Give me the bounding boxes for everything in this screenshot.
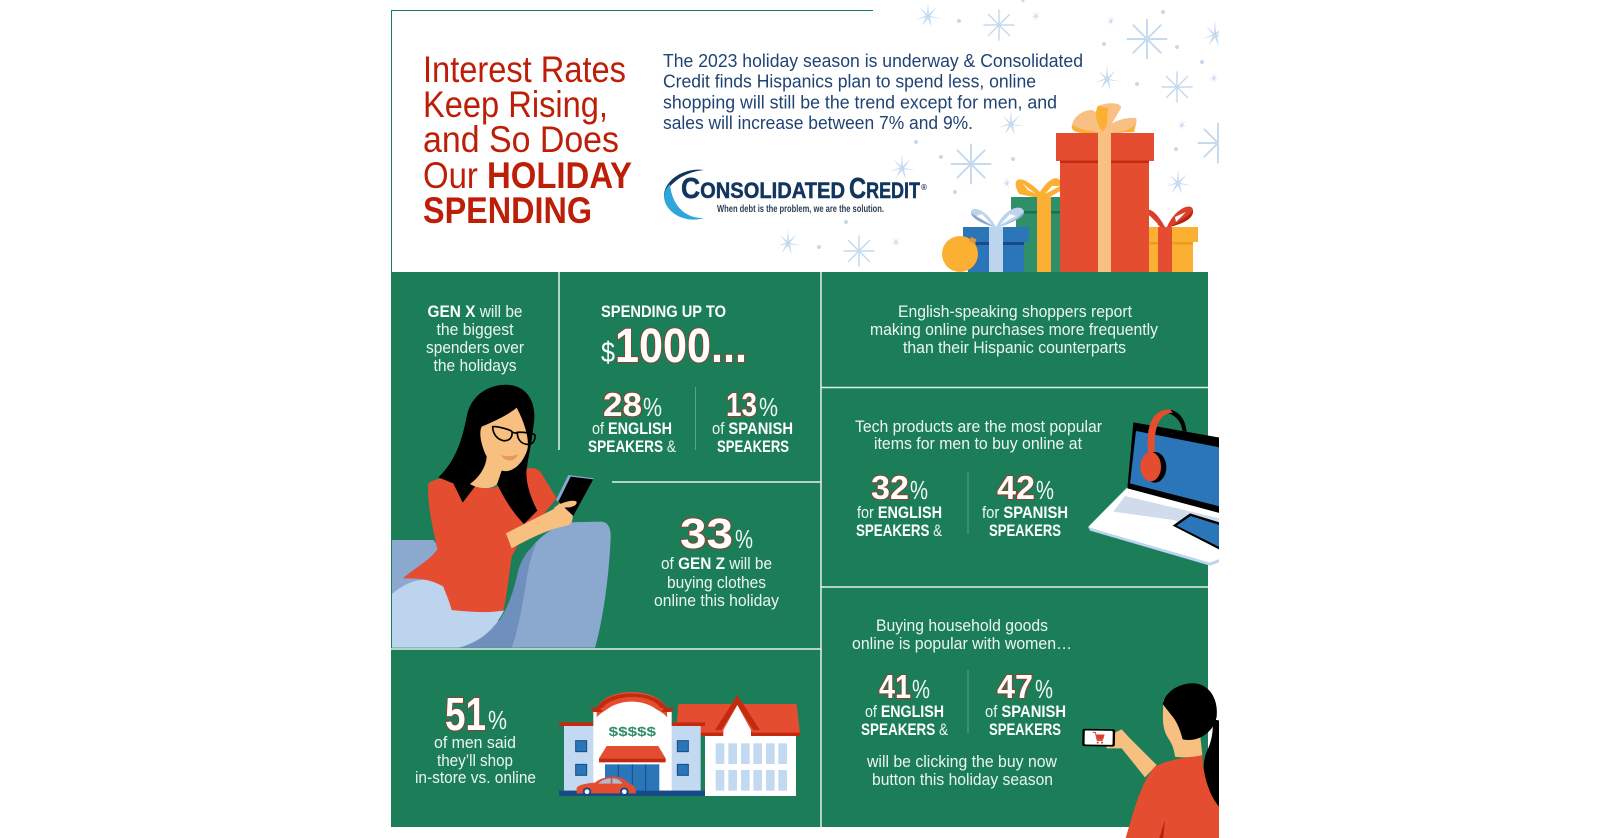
stat: 51% of men: % (488, 705, 507, 735)
stat: 13% Spanish speakers (712, 386, 793, 456)
household text: online is popular with women… (852, 635, 1072, 653)
$1000 figure: $ (601, 337, 615, 369)
face and neck (470, 408, 528, 488)
logo: Consolidated Credit (664, 170, 927, 220)
store centre (590, 692, 674, 791)
stat: 42% Spanish speakers (982, 469, 1068, 540)
right gift (1146, 207, 1198, 272)
Gen X text (426, 303, 524, 375)
stat: 51% of men: they’ll shop (437, 752, 513, 770)
stat: 32% English speakers: SPEAKERS & (856, 522, 942, 540)
panel: Gen Z clothes stat (654, 510, 780, 610)
panel: English speakers online: than their Hispanic counterparts (903, 339, 1126, 357)
panel: Gen X (392, 303, 611, 648)
tech text (855, 418, 1102, 453)
hair (438, 385, 537, 524)
panel: Gen Z clothes stat: 33 (680, 510, 733, 558)
stat: 51% of men: of men said (434, 734, 516, 752)
intro text: sales will increase between 7% and 9%. (663, 112, 973, 133)
logo: Consolidated Credit: CREDIT (849, 173, 920, 205)
Gen X text: the holidays (434, 357, 516, 375)
blue gift (963, 208, 1029, 272)
stat: 32% English speakers: 32 (871, 469, 909, 506)
stat: 28% English speakers: 28 (603, 386, 642, 423)
store centre: $$$$$ (609, 725, 656, 739)
phone on laptop (1172, 513, 1219, 550)
illustration: woman with phone and cart (1082, 683, 1222, 838)
stat: 32% English speakers: % (910, 475, 928, 505)
closing text (866, 753, 1057, 789)
stat: 51% of men (415, 688, 536, 787)
headphones (1140, 409, 1187, 483)
car (577, 777, 636, 796)
stat: 13% Spanish speakers: 13 (726, 386, 757, 423)
heading: SPENDING UP TO (601, 303, 726, 321)
logo swoosh (664, 170, 704, 220)
stat: 42% Spanish speakers: SPEAKERS (989, 522, 1061, 540)
green panel background (391, 272, 1208, 827)
panel: Gen Z clothes stat: % (735, 524, 753, 554)
stat: 47% Spanish speakers: SPEAKERS (989, 721, 1061, 739)
stat: 42% Spanish speakers: % (1036, 475, 1054, 505)
closing text: button this holiday season (872, 771, 1053, 789)
green gift (1011, 178, 1062, 272)
intro text: The 2023 holiday season is underway & Consolidated (663, 50, 1083, 71)
title: Our HOLIDAY (423, 155, 632, 196)
closing text: will be clicking the buy now (866, 753, 1057, 771)
stat: 13% Spanish speakers: SPEAKERS (717, 438, 789, 456)
body (1125, 755, 1222, 838)
stat: 41% English speakers: SPEAKERS & (861, 721, 948, 739)
stat: 47% Spanish speakers: 47 (997, 668, 1033, 705)
stat: 28% English speakers: SPEAKERS & (588, 438, 676, 456)
panel: men in-store (415, 688, 800, 796)
panel: tech products (855, 409, 1233, 566)
title: Interest Rates (423, 49, 626, 90)
tech text: Tech products are the most popular (855, 418, 1102, 436)
stat: 42% Spanish speakers: 42 (997, 469, 1035, 506)
panel: Gen Z clothes stat: online this holiday (654, 592, 780, 610)
Gen X text: GEN X will be (428, 303, 522, 321)
title: and So Does (423, 119, 619, 160)
phone (553, 475, 594, 516)
stat: 13% Spanish speakers: % (759, 392, 778, 422)
hair (1163, 683, 1217, 740)
stat: 51% of men: 51 (445, 688, 486, 740)
stat: 41% English speakers (861, 668, 948, 739)
household text (852, 617, 1072, 653)
stat: 28% English speakers: of ENGLISH (592, 420, 672, 438)
stat: 28% English speakers (588, 386, 676, 456)
Gen X text: the biggest (436, 321, 514, 339)
ground (559, 791, 705, 796)
panel dividers (391, 272, 1208, 827)
arm and hand (506, 500, 577, 548)
stat: 32% English speakers (856, 469, 942, 540)
arm (1106, 729, 1157, 777)
house building (676, 695, 800, 796)
stat: 51% of men: in-store vs. online (415, 769, 536, 787)
panel: English speakers online: English-speaking shoppers report (898, 303, 1132, 321)
panel: Gen Z clothes stat: buying clothes (667, 574, 766, 592)
panel: English speakers online (870, 303, 1159, 357)
logo: Consolidated Credit: When debt is the problem, we are the solution. (717, 203, 884, 215)
illustration: store (559, 692, 800, 796)
panel: spending up to $1000 (588, 303, 793, 456)
panel: household goods (852, 617, 1222, 838)
ponytail (1204, 720, 1219, 806)
snowflake background (776, 0, 1238, 266)
panel: English speakers online: making online purchases more frequently (870, 321, 1159, 339)
intro text (663, 50, 1083, 133)
stat: 47% Spanish speakers: % (1035, 674, 1053, 704)
stat: 41% English speakers: of ENGLISH (865, 703, 944, 721)
intro text: shopping will still be the trend except for men, and (663, 92, 1057, 112)
panel: Gen Z clothes stat: of GEN Z will be (661, 555, 772, 573)
intro text: Credit finds Hispanics plan to spend less, online (663, 70, 1036, 92)
logo: Consolidated Credit: CONSOLIDATED (681, 173, 845, 205)
head (1163, 700, 1202, 757)
glasses (493, 427, 535, 444)
stat: 32% English speakers: for ENGLISH (857, 504, 942, 522)
logo: Consolidated Credit: ® (921, 183, 927, 192)
gifts illustration (942, 103, 1198, 272)
title: SPENDING (423, 190, 592, 231)
store wings (559, 722, 705, 791)
orange ornament (942, 236, 978, 272)
title (423, 49, 632, 231)
big red gift (1056, 103, 1154, 272)
sofa (392, 522, 611, 648)
phone with cart (1082, 729, 1115, 747)
header frame line (392, 10, 873, 272)
trousers (392, 580, 504, 648)
household text: Buying household goods (876, 617, 1048, 635)
stat: 47% Spanish speakers (985, 668, 1066, 739)
Gen X text: spenders over (426, 339, 524, 357)
title: Keep Rising, (423, 84, 608, 125)
illustration: woman on sofa with phone (392, 385, 611, 648)
stat: 41% English speakers: 41 (879, 668, 911, 705)
stat: 42% Spanish speakers: for SPANISH (982, 504, 1068, 522)
stat: 28% English speakers: % (643, 392, 662, 422)
illustration: laptop with headphones (1088, 409, 1233, 566)
red sweater (403, 468, 557, 612)
stat: 47% Spanish speakers: of SPANISH (985, 703, 1066, 721)
$1000 figure: 1000... (615, 320, 747, 373)
stat: 13% Spanish speakers: of SPANISH (712, 420, 793, 438)
tech text: items for men to buy online at (874, 435, 1082, 453)
stat: 41% English speakers: % (912, 674, 930, 704)
